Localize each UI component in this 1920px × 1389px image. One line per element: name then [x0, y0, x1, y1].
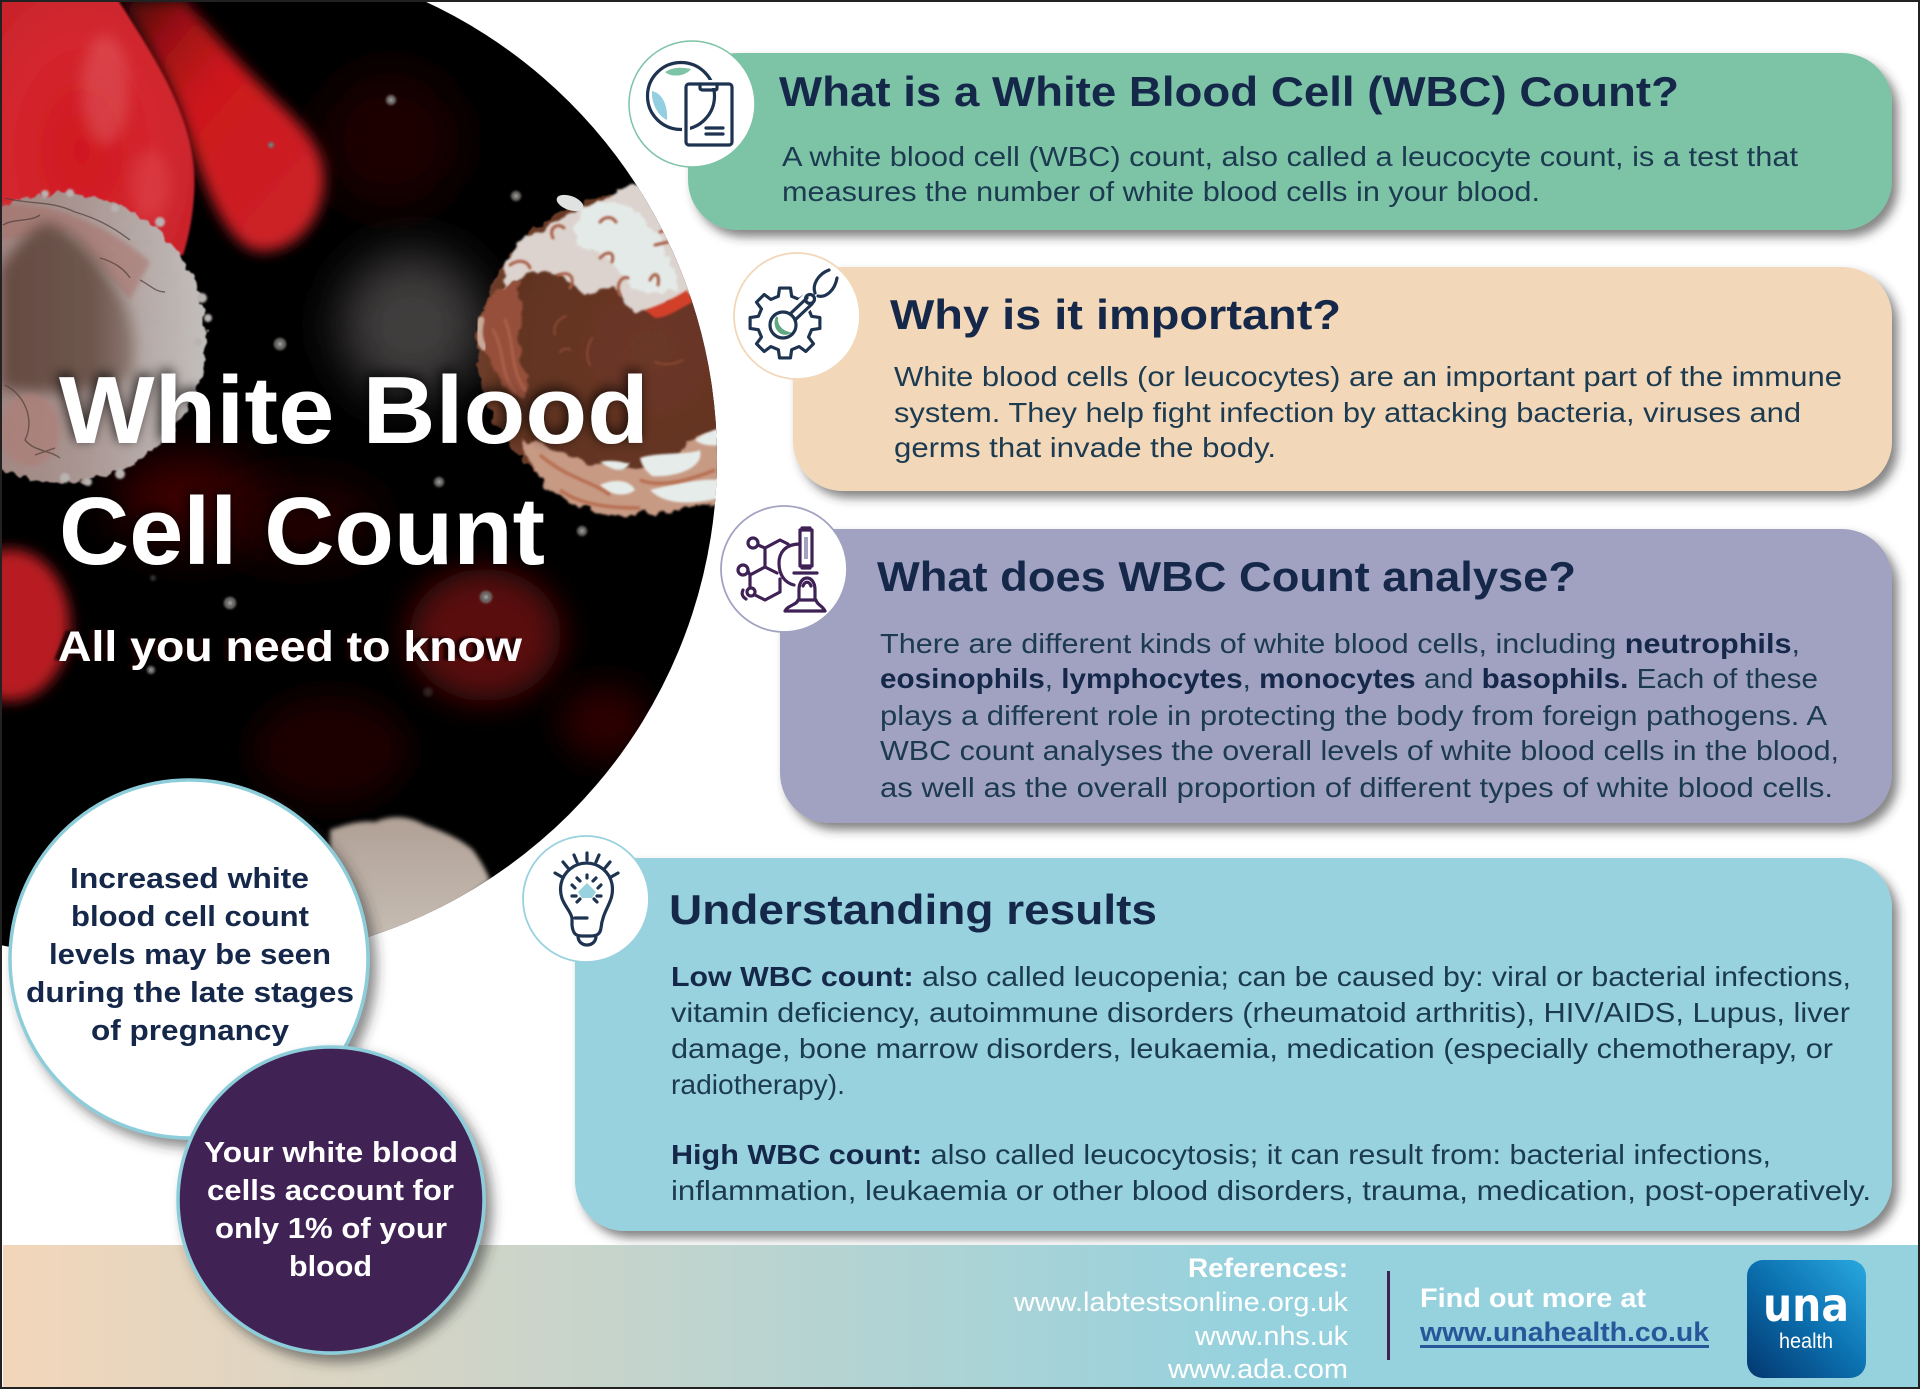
icon: light bulb — [523, 836, 649, 962]
body: what is a WBC count — [782, 141, 1798, 207]
body: high WBC count — [671, 1139, 1871, 1206]
body: low WBC count: Low WBC count: also called leucopenia; can be caused by: viral or bacterial infections, — [671, 961, 1851, 992]
body: what is a WBC count: measures the number of white blood cells in your blood. — [782, 176, 1540, 207]
references: www.ada.com — [1167, 1354, 1348, 1384]
body: high WBC count: High WBC count: also called leucocytosis; it can result from: bacterial infections, — [671, 1139, 1771, 1170]
logo: una health: una — [1763, 1278, 1849, 1332]
body: why is it important: White blood cells (or leucocytes) are an important part of the immune — [894, 361, 1842, 392]
photo: blood cells in a large circle — [2, 2, 717, 947]
body: low WBC count — [671, 961, 1851, 1100]
body: what does WBC count analyse: WBC count analyses the overall levels of white blood cells in the blood, — [880, 735, 1839, 766]
title — [59, 357, 649, 585]
panel: what does WBC count analyse — [780, 529, 1892, 823]
body: what is a WBC count: A white blood cell (WBC) count, also called a leucocyte count, is a test that — [782, 141, 1798, 172]
body: high WBC count: inflammation, leukaemia or other blood disorders, trauma, medication, post-operatively. — [671, 1175, 1871, 1206]
footer band — [3, 1245, 1920, 1389]
logo: una health — [1747, 1260, 1866, 1378]
find out more link: www.unahealth.co.uk — [1419, 1317, 1710, 1347]
callout: increased white blood cell count — [10, 780, 368, 1138]
callout: white blood cells account for 1%: cells account for — [207, 1175, 454, 1207]
heading: what is a WBC count: What is a White Blood Cell (WBC) Count? — [779, 68, 1679, 115]
body: low WBC count: radiotherapy). — [671, 1069, 845, 1100]
callout: increased white blood cell count: levels may be seen — [49, 939, 331, 971]
body: why is it important: germs that invade the body. — [894, 432, 1276, 463]
subtitle: All you need to know — [58, 623, 523, 671]
icon: gear and probe — [734, 253, 860, 379]
heading: what does WBC count analyse: What does WBC Count analyse? — [877, 553, 1576, 600]
heading: understanding results: Understanding results — [669, 886, 1157, 933]
references: www.labtestsonline.org.uk — [1013, 1287, 1349, 1317]
find out more link: Find out more at — [1420, 1283, 1646, 1313]
body: what does WBC count analyse: eosinophils , lymphocytes , monocytes and basophils. Each of these — [880, 663, 1818, 694]
callout: white blood cells account for 1% — [178, 1047, 484, 1353]
body: why is it important — [894, 361, 1842, 463]
body: what does WBC count analyse: There are different kinds of white blood cells, including neutrophils , — [880, 628, 1800, 659]
panel: what is a WBC count — [688, 53, 1892, 230]
icon: molecule and microscope — [721, 506, 847, 632]
body: what does WBC count analyse: plays a different role in protecting the body from foreign pathogens. A — [880, 700, 1827, 731]
panel: understanding results — [575, 858, 1892, 1231]
title: White Blood — [59, 357, 649, 464]
references: www.nhs.uk — [1194, 1321, 1349, 1351]
panel: why is it important — [793, 267, 1892, 491]
callout: increased white blood cell count: during the late stages — [26, 977, 354, 1009]
references — [1013, 1253, 1349, 1384]
body: what does WBC count analyse — [880, 628, 1839, 803]
callout: white blood cells account for 1%: Your white blood — [204, 1137, 458, 1169]
find out more link — [1419, 1283, 1710, 1348]
icon: globe and phone — [629, 41, 755, 167]
body: why is it important: system. They help fight infection by attacking bacteria, viruses and — [894, 397, 1801, 428]
heading: why is it important: Why is it important? — [890, 291, 1341, 338]
callout: increased white blood cell count: Increased white — [70, 863, 309, 895]
body: low WBC count: vitamin deficiency, autoimmune disorders (rheumatoid arthritis), HIV/AIDS, Lupus, liver — [671, 997, 1850, 1028]
callout: increased white blood cell count: blood cell count — [71, 901, 309, 933]
callout: white blood cells account for 1%: blood — [289, 1251, 372, 1283]
title: Cell Count — [59, 478, 545, 585]
callout: increased white blood cell count: of pregnancy — [91, 1015, 289, 1047]
callout: white blood cells account for 1%: only 1% of your — [215, 1213, 447, 1245]
body: low WBC count: damage, bone marrow disorders, leukaemia, medication (especially chemotherapy, or — [671, 1033, 1833, 1064]
logo: una health: health — [1779, 1330, 1833, 1353]
body: what does WBC count analyse: as well as the overall proportion of different types of white blood cells. — [880, 772, 1833, 803]
references: References: — [1188, 1253, 1348, 1283]
